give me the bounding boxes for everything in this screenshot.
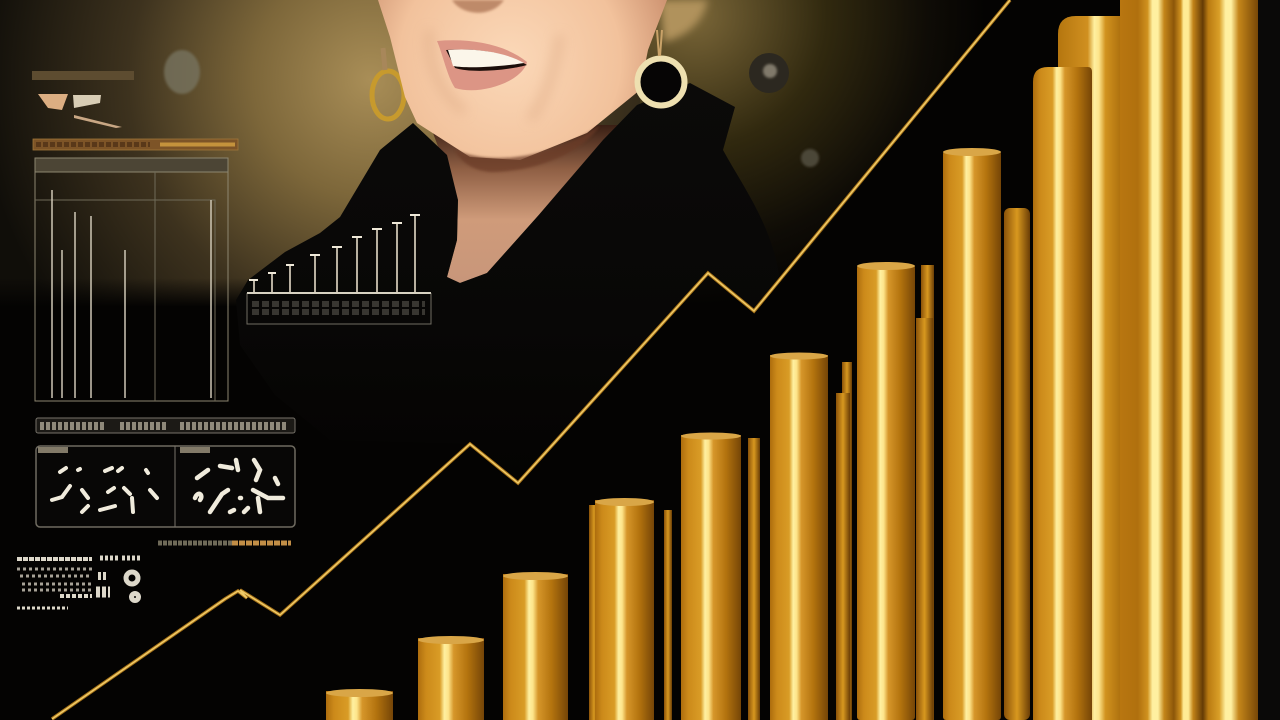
black turtleneck	[236, 83, 780, 483]
portrait	[236, 0, 780, 483]
main bars	[326, 691, 393, 720]
mouth interior	[446, 50, 527, 71]
nose shadow	[452, 0, 504, 13]
bokeh spot small	[801, 149, 819, 167]
bokeh spot left	[164, 50, 200, 94]
left scatter	[52, 468, 157, 512]
hair	[660, 0, 708, 42]
neck	[430, 125, 620, 283]
data panel with two boxes	[36, 418, 295, 543]
chin shadow	[455, 125, 600, 172]
right scatter	[195, 460, 283, 512]
wireframe panel: heading and line chart	[32, 71, 238, 401]
gold bars chart	[326, 0, 1258, 720]
bokeh spot right	[749, 53, 789, 93]
noisy data table	[17, 558, 140, 608]
chart frame	[35, 158, 228, 172]
rising gold trend line	[52, 0, 1010, 719]
caption	[158, 540, 232, 546]
mini bar chart	[247, 215, 431, 324]
lips	[437, 40, 527, 90]
title bar	[33, 139, 238, 150]
left earring	[372, 48, 404, 119]
background bars	[1058, 16, 1124, 720]
right earring	[638, 30, 684, 106]
header strip	[36, 418, 295, 433]
small image pieces	[38, 94, 122, 128]
face	[378, 0, 667, 160]
teeth	[448, 50, 524, 67]
heading strip	[32, 71, 134, 80]
smile lines	[429, 30, 560, 120]
boxes	[36, 446, 295, 527]
